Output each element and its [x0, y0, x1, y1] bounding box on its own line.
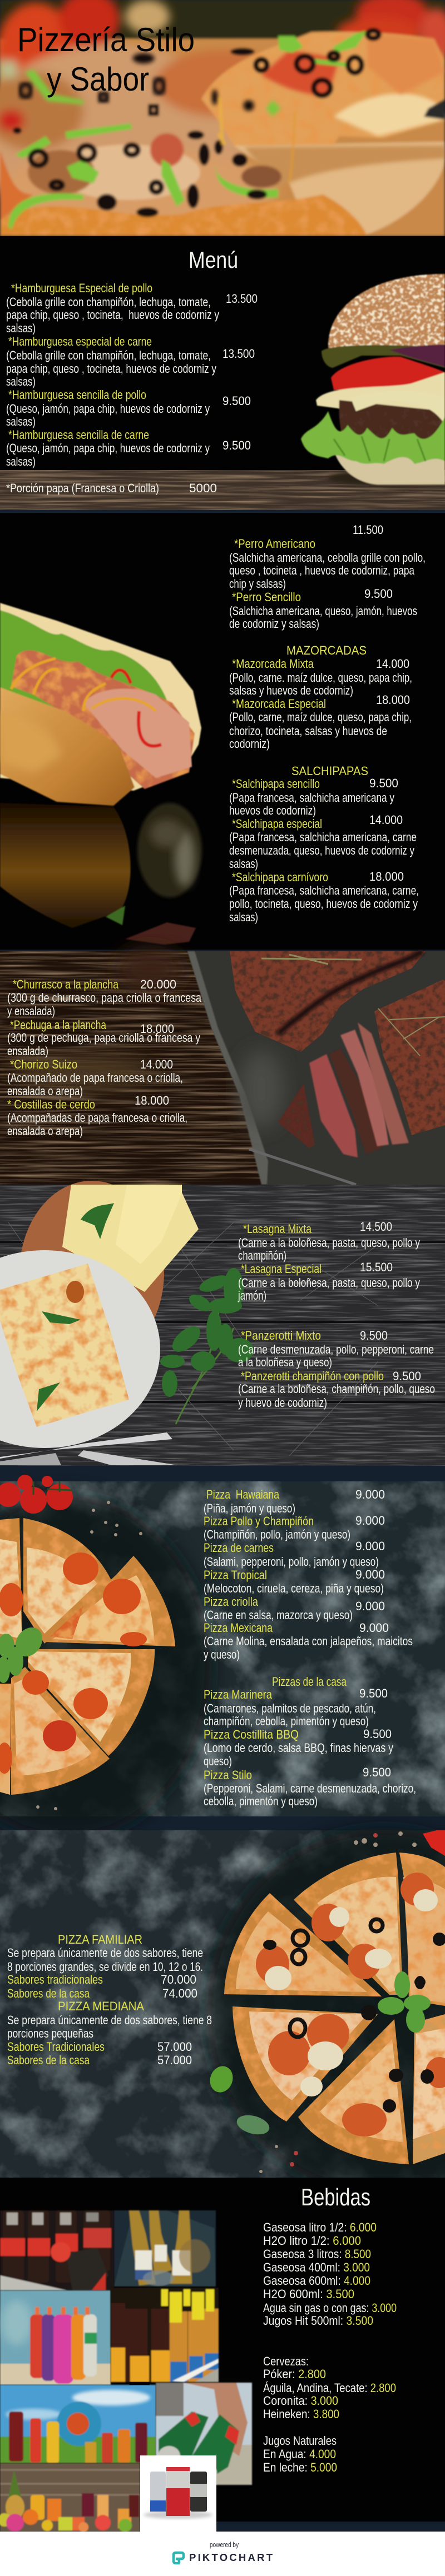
- menu item: lasagna especial: 15.500: [360, 1260, 393, 1274]
- block: pizza mediana: porciones pequeñas: [7, 2026, 93, 2040]
- slate with steaks: [187, 951, 445, 1185]
- photo: póker and águila beers: [111, 2288, 219, 2382]
- photo: hit juices: [0, 2385, 156, 2463]
- price list: gaseosas y jugos: H2O 600ml: 3.500: [263, 2287, 354, 2301]
- menu item: costillas: 18.000: [135, 1094, 169, 1107]
- block: pizza familiar: 74.000: [162, 1986, 197, 2000]
- panel: pizzas: [0, 1475, 445, 1839]
- heading: pizzas de la casa: Pizzas de la casa: [272, 1675, 347, 1689]
- menu item: lasagna mixta: 14.500: [360, 1220, 392, 1234]
- menu item: salchipapa sencillo: *Salchipapa sencillo: [232, 777, 320, 791]
- menu item: chorizo suizo: *Chorizo Suizo: [10, 1057, 77, 1071]
- menu item: lasagna especial: jamón): [238, 1289, 266, 1302]
- menu item: salchipapa sencillo: (Papa francesa, salchicha americana y: [229, 791, 394, 805]
- menu item: salchipapa especial: [229, 813, 417, 871]
- title: Pizzería Stilo: [17, 21, 195, 58]
- menu item: hamburguesa especial de pollo: (Cebolla grille con champiñón, lechuga, tomate,: [6, 295, 211, 309]
- photo: corona bottles: [114, 2210, 216, 2287]
- panel: lasagna y panzerotti: [0, 1181, 445, 1466]
- block: pizza mediana: Sabores Tradicionales: [7, 2040, 105, 2054]
- price list: gaseosas y jugos: H2O litro 1/2: 6.000: [263, 2234, 361, 2248]
- menu item: hamburguesa especial de carne: [6, 335, 255, 388]
- wood background: [0, 947, 445, 1185]
- wood table: [0, 470, 445, 510]
- menu item: pizza tropical: [204, 1567, 385, 1595]
- logo wordmark: PIKTOCHART: [189, 2552, 273, 2563]
- menu item: hamburguesa sencilla de carne: *Hamburguesa sencilla de carne: [8, 428, 149, 442]
- menu item: hamburguesa especial de pollo: [6, 281, 258, 335]
- menu item: hamburguesa especial de carne: papa chip, queso , tocineta, huevos de codorniz y: [6, 362, 216, 376]
- menu item: perro sencillo: 9.500: [364, 587, 393, 601]
- block: pizza familiar: Sabores de la casa: [7, 1986, 90, 2000]
- panel: hero pizza: [0, 0, 445, 236]
- menu item: salchipapa especial: salsas): [229, 857, 258, 871]
- menu item: lasagna mixta: [238, 1220, 420, 1262]
- menu item: mazorcada mixta: [229, 657, 412, 697]
- block: pizza mediana: PIZZA MEDIANA: [58, 1999, 144, 2013]
- icon: mushroom and olive pizza: [206, 1830, 445, 2173]
- menu item: hamburguesa especial de pollo: *Hamburguesa Especial de pollo: [11, 281, 152, 295]
- price list: gaseosas y jugos: [263, 2220, 397, 2328]
- menu item: hamburguesa sencilla de pollo: salsas): [6, 415, 36, 428]
- menu item: pizza de carnes: (Salami, pepperoni, pollo, jamón y queso): [204, 1555, 379, 1569]
- item prices: perros: 11.500: [353, 523, 383, 537]
- footer: powered by piktochart: [0, 2532, 445, 2576]
- menu item: panzerotti mixto: [238, 1329, 434, 1369]
- menu item: hamburguesa sencilla de pollo: [6, 388, 251, 428]
- icon: piktochart logo: [174, 2553, 184, 2563]
- menu item: costillas: * Costillas de cerdo: [7, 1097, 95, 1111]
- menu item: hamburguesa sencilla de pollo: *Hamburguesa sencilla de pollo: [8, 388, 146, 402]
- menu item: panzerotti champiñón con pollo: y huevo de codorniz): [238, 1396, 327, 1410]
- price list: gaseosas y jugos: Gaseosa 400ml: 3.000: [263, 2260, 370, 2274]
- menu item: hamburguesa especial de carne: (Cebolla grille con champiñón, lechuga, tomate,: [6, 348, 211, 362]
- menu item: pizza marinera: [204, 1686, 388, 1728]
- photo: heineken cans: [156, 2383, 252, 2485]
- heading: salchipapas: SALCHIPAPAS: [291, 764, 368, 778]
- menu item: pizza mexicana: y queso): [204, 1648, 240, 1661]
- menu item: pizza hawaiana: 9.000: [355, 1487, 385, 1501]
- panel: carnes: [0, 947, 445, 1185]
- menu item: pizza marinera: 9.500: [359, 1686, 388, 1700]
- heading: Menú: Menú: [189, 247, 238, 273]
- menu item: perro americano: *Perro Americano: [234, 537, 315, 551]
- menu item: hamburguesa sencilla de pollo: (Queso, jamón, papa chip, huevos de codorniz y: [6, 402, 210, 416]
- menu item: pizza stilo: cebolla, pimentón y queso): [204, 1794, 318, 1808]
- menu item: pechuga: *Pechuga a la plancha: [10, 1018, 107, 1032]
- board with cheese: [19, 1181, 199, 1364]
- photo: coca-cola bottles: [0, 2210, 114, 2290]
- menu item: pizza mexicana: 9.000: [359, 1621, 389, 1635]
- menu item: mazorcada especial: [229, 693, 412, 751]
- photo: fruit juices: [0, 2463, 140, 2532]
- menu item: salchipapa carnívoro: 18.000: [369, 870, 404, 883]
- hero photo: [0, 0, 445, 236]
- menu item: pizza pollo y champiñón: (Champiñón, pollo, jamón y queso): [204, 1527, 350, 1541]
- menu item: chorizo suizo: (Acompañado de papa francesa o criolla,: [7, 1071, 183, 1085]
- price list: gaseosas y jugos: Agua sin gas o con gas: 3.000: [263, 2301, 397, 2315]
- menu item: chorizo suizo: 14.000: [140, 1057, 173, 1071]
- block: pizza familiar: PIZZA FAMILIAR: [58, 1933, 142, 1946]
- menu item: costillas: (Acompañadas de papa francesa o criolla,: [7, 1111, 187, 1125]
- menu item: hamburguesa sencilla de pollo: 9.500: [222, 394, 251, 408]
- menu item: pizza criolla: [204, 1595, 385, 1622]
- price list: gaseosas y jugos: Gaseosa 600ml: 4.000: [263, 2274, 370, 2288]
- menu item: panzerotti champiñón con pollo: 9.500: [393, 1369, 421, 1383]
- plank background: [0, 1185, 445, 1466]
- menu item: hamburguesa sencilla de carne: salsas): [6, 455, 36, 468]
- menu item: salchipapa sencillo: 9.500: [369, 776, 398, 790]
- menu item: hamburguesa sencilla de carne: (Queso, jamón, papa chip, huevos de codorniz y: [6, 441, 210, 455]
- menu item: pizza stilo: 9.500: [363, 1765, 391, 1779]
- menu item: salchipapa sencillo: huevos de codorniz): [229, 803, 316, 817]
- block: pizza familiar: Sabores tradicionales: [7, 1973, 103, 1986]
- block: pizza mediana: Se prepara únicamente de dos sabores, tiene 8: [7, 2013, 212, 2027]
- menu item: mazorcada especial: codorniz): [229, 737, 270, 751]
- menu item: hamburguesa especial de carne: *Hamburguesa especial de carne: [8, 335, 152, 348]
- block: pizza familiar: 70.000: [161, 1973, 196, 1986]
- heading: mazorcadas: MAZORCADAS: [286, 643, 367, 657]
- menu item: pizza costillita bbq: queso): [204, 1754, 232, 1768]
- menu item: pizza costillita bbq: 9.500: [363, 1727, 392, 1741]
- menu item: mazorcada especial: chorizo, tocineta, salsas y huevos de: [229, 724, 387, 738]
- menu item: salchipapa sencillo: [229, 776, 398, 817]
- menu item: pizza costillita bbq: Pizza Costillita BBQ: [204, 1728, 299, 1741]
- price list: cervezas: Águila, Andina, Tecate: 2.800: [263, 2381, 396, 2395]
- price list: jugos naturales: Jugos Naturales: [263, 2434, 337, 2448]
- icon: pepperoni pizza: [0, 1501, 175, 1810]
- menu item: pizza pollo y champiñón: Pizza Pollo y Champiñón: [204, 1514, 314, 1528]
- price list: cervezas: Póker: 2.800: [263, 2367, 326, 2381]
- menu item: panzerotti mixto: 9.500: [360, 1329, 388, 1342]
- menu item: panzerotti champiñón con pollo: *Panzerotti champiñón con pollo: [241, 1369, 384, 1383]
- panel: tamaños de pizza: [0, 1828, 445, 2195]
- menu item: mazorcada especial: *Mazorcada Especial: [232, 697, 326, 711]
- price list: gaseosas y jugos: Gaseosa litro 1/2: 6.000: [263, 2220, 377, 2234]
- menu item: pizza tropical: 9.000: [355, 1567, 385, 1581]
- menu item: hamburguesa sencilla de carne: 9.500: [222, 438, 251, 452]
- price list: cervezas: [263, 2354, 396, 2421]
- menu item: salchipapa carnívoro: [229, 870, 419, 924]
- menu item: pizza marinera: champiñón, cebolla, pimentón y queso): [204, 1714, 369, 1728]
- menu item: hamburguesa especial de pollo: papa chip, queso , tocineta, huevos de codorniz y: [6, 308, 219, 322]
- menu item: lasagna mixta: champiñón): [238, 1249, 286, 1262]
- menu item: churrasco: (300 g de churrasco, papa criolla o francesa: [7, 991, 202, 1005]
- menu item: hamburguesa especial de carne: 13.500: [222, 347, 255, 361]
- menu item: salchipapa carnívoro: salsas): [229, 910, 258, 924]
- menu item: hamburguesa sencilla de carne: [6, 428, 251, 468]
- menu item: churrasco: *Churrasco a la plancha: [13, 977, 119, 991]
- menu item: chorizo suizo: [7, 1057, 183, 1098]
- menu item: chorizo suizo: ensalada o arepa): [7, 1084, 83, 1098]
- menu item: pizza criolla: Pizza criolla: [204, 1595, 259, 1609]
- price list: gaseosas y jugos: Gaseosa 3 litros: 8.500: [263, 2247, 371, 2261]
- menu item: pizza costillita bbq: (Lomo de cerdo, salsa BBQ, finas hiervas y: [204, 1741, 393, 1755]
- block: pizza familiar: [7, 1933, 203, 2000]
- menu item: pizza mexicana: Pizza Mexicana: [204, 1621, 273, 1635]
- block: pizza mediana: 57.000: [157, 2040, 192, 2054]
- price list: cervezas: Coronita: 3.000: [263, 2394, 338, 2408]
- menu item: lasagna mixta: *Lasagna Mixta: [243, 1222, 312, 1236]
- menu item: hamburguesa especial de pollo: salsas): [6, 321, 36, 335]
- menu item: pizza criolla: (Carne en salsa, mazorca y queso): [204, 1608, 353, 1622]
- slate background: [0, 1481, 445, 1839]
- menu item: hamburguesa especial de carne: salsas): [6, 375, 36, 388]
- menu item: panzerotti mixto: a la boloñesa y queso): [238, 1355, 332, 1369]
- photo: tecate cans: [140, 2455, 216, 2532]
- block: pizza familiar: Se prepara únicamente de dos sabores, tiene: [7, 1946, 203, 1960]
- title: y Sabor: [47, 61, 149, 98]
- menu item: pizza criolla: 9.000: [355, 1599, 385, 1613]
- menu item: pizza de carnes: Pizza de carnes: [204, 1541, 274, 1555]
- menu item: churrasco: y ensalada): [7, 1004, 55, 1018]
- menu item: mazorcada especial: 18.000: [376, 693, 410, 707]
- menu item: pizza marinera: (Camarones, palmitos de pescado, atún,: [204, 1701, 376, 1715]
- menu item: costillas: [7, 1094, 187, 1138]
- icon: burger: [301, 274, 445, 486]
- menu item: pizza tropical: Pizza Tropical: [204, 1568, 267, 1582]
- menu item: pizza hawaiana: [204, 1487, 385, 1515]
- photo: postobón bottles: [0, 2290, 111, 2385]
- menu item: salchipapa especial: *Salchipapa especial: [232, 817, 322, 831]
- block: pizza familiar: 8 porciones grandes, se divide en 10, 12 o 16.: [7, 1960, 203, 1974]
- title: [17, 21, 195, 98]
- price list: gaseosas y jugos: Jugos Hit 500ml: 3.500: [263, 2314, 373, 2328]
- menu item: mazorcada mixta: 14.000: [376, 657, 409, 671]
- menu item: costillas: ensalada o arepa): [7, 1124, 83, 1138]
- menu item: panzerotti champiñón con pollo: [238, 1369, 435, 1410]
- menu item: pizza hawaiana: Pizza Hawaiana: [206, 1487, 280, 1501]
- menu item: pizza tropical: (Melocoton, ciruela, cereza, piña y queso): [204, 1581, 384, 1595]
- menu item: lasagna especial: *Lasagna Especial: [241, 1262, 322, 1276]
- menu item: pizza marinera: Pizza Marinera: [204, 1688, 273, 1701]
- panel: perros, mazorcadas, salchipapas: [0, 513, 445, 950]
- menu item: pizza costillita bbq: [204, 1727, 393, 1768]
- block: pizza mediana: 57.000: [157, 2053, 192, 2067]
- menu item: pizza stilo: Pizza Stilo: [204, 1768, 252, 1782]
- menu item: porción papa: 5000: [189, 481, 217, 495]
- icon: hot dog: [0, 603, 202, 945]
- menu item: perro sencillo: *Perro Sencillo: [232, 590, 301, 604]
- menu item: pizza de carnes: 9.000: [355, 1539, 385, 1553]
- menu item: pizza mexicana: [204, 1621, 413, 1661]
- price list: jugos naturales: [263, 2434, 337, 2474]
- price list: cervezas: Cervezas:: [263, 2354, 309, 2368]
- block: pizza mediana: Sabores de la casa: [7, 2053, 90, 2067]
- menu item: hamburguesa especial de pollo: 13.500: [226, 292, 258, 306]
- menu item: lasagna especial: [238, 1260, 420, 1302]
- menu item: pechuga: ensalada): [7, 1044, 48, 1058]
- menu item: panzerotti mixto: *Panzerotti Mixto: [241, 1329, 321, 1342]
- menu item: churrasco: [7, 977, 202, 1018]
- menu item: pizza hawaiana: (Piña, jamón y queso): [204, 1501, 295, 1515]
- menu item: pizza pollo y champiñón: [204, 1514, 385, 1541]
- block: pizza mediana: [7, 1999, 212, 2067]
- menu item: salchipapa carnívoro: *Salchipapa carnívoro: [232, 870, 328, 884]
- plate with lasagna: [0, 1250, 178, 1465]
- menu item: pizza de carnes: [204, 1539, 385, 1569]
- powered by label: powered by: [210, 2541, 239, 2549]
- menu item: pechuga: [7, 1018, 200, 1058]
- menu item: pizza pollo y champiñón: 9.000: [355, 1514, 385, 1527]
- price list: jugos naturales: En Agua: 4.000: [263, 2447, 336, 2461]
- icon: parsley: [160, 1268, 254, 1424]
- menu item: churrasco: 20.000: [140, 977, 176, 991]
- icon: tomatoes: [0, 1475, 73, 1514]
- menu item: mazorcada mixta: salsas y huevos de codorniz): [229, 683, 353, 697]
- menu item: mazorcada mixta: *Mazorcada Mixta: [232, 657, 314, 671]
- menu item: salchipapa especial: 14.000: [369, 813, 403, 827]
- menu item: perro americano: chip y salsas): [229, 577, 286, 591]
- menu item: perro americano: [229, 537, 426, 591]
- slate background: [0, 1828, 445, 2195]
- menu item: pizza stilo: [204, 1765, 416, 1808]
- menu item: pechuga: 18.000: [140, 1022, 174, 1036]
- heading: bebidas: Bebidas: [301, 2184, 370, 2211]
- menu item: perro sencillo: de codorniz y salsas): [229, 617, 319, 631]
- hot dog reflection: [0, 803, 202, 945]
- price list: jugos naturales: En leche: 5.000: [263, 2460, 337, 2474]
- menu item: porción papa: *Porción papa (Francesa o Criolla): [6, 481, 159, 495]
- menu item: perro sencillo: [229, 587, 417, 631]
- menu item: pechuga: (300 g de pechuga, papa criolla o francesa y: [7, 1031, 200, 1045]
- panel: hamburguesas: [0, 236, 445, 510]
- price list: cervezas: Heineken: 3.800: [263, 2407, 339, 2421]
- panel: bebidas: [0, 2178, 445, 2532]
